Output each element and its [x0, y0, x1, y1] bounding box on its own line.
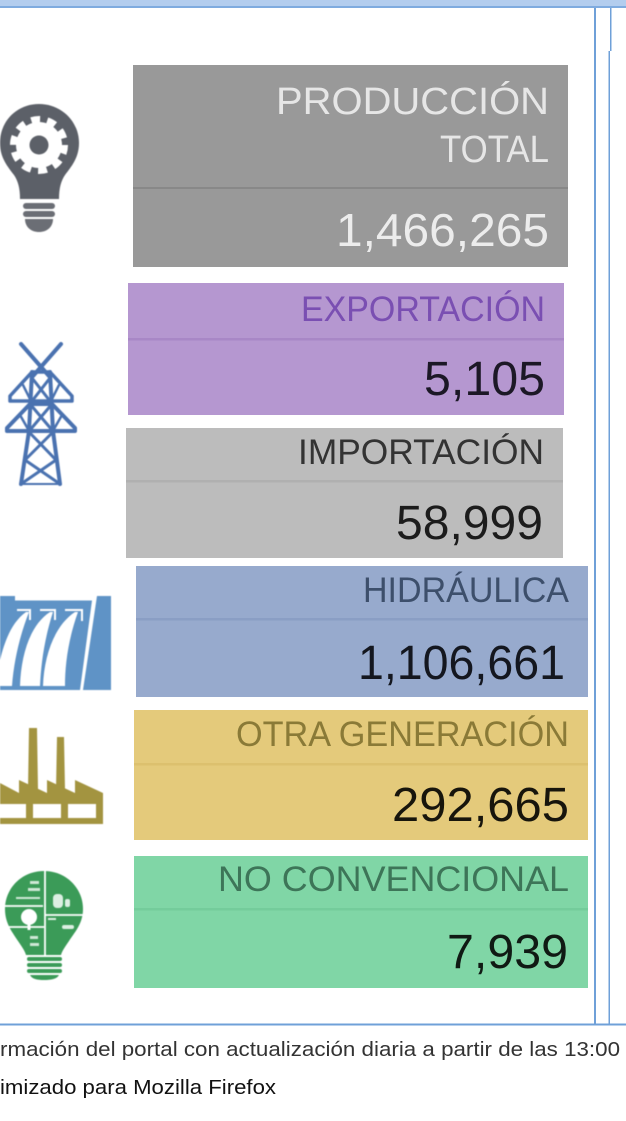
panel: hidráulica: HIDRÁULICA [363, 571, 570, 610]
panel: importación: IMPORTACIÓN [298, 433, 544, 472]
icon: hydroelectric dam [0, 596, 111, 690]
panel: no convencional: NO CONVENCIONAL [218, 860, 569, 899]
top frame bar [0, 0, 626, 8]
panel: producción total: 1,466,265 [336, 204, 549, 256]
panel: producción total [133, 65, 568, 267]
panel: exportación [128, 283, 564, 415]
panel: producción total: TOTAL [440, 129, 549, 171]
panel: otra generación: OTRA GENERACIÓN [236, 715, 569, 754]
panel: otra generación [134, 710, 588, 840]
panel: no convencional: 7,939 [447, 926, 568, 979]
panel: otra generación: 292,665 [392, 779, 569, 832]
panel: importación: 58,999 [396, 497, 543, 550]
panel: producción total: PRODUCCIÓN [276, 80, 549, 123]
panel: hidráulica: 1,106,661 [358, 637, 565, 690]
panel: importación [126, 428, 563, 558]
icon: transmission tower [7, 344, 75, 484]
panel: no convencional [134, 856, 588, 988]
panel: exportación: EXPORTACIÓN [301, 290, 545, 329]
icon: green eco light bulb [5, 871, 83, 980]
panel: hidráulica [136, 566, 588, 697]
panel: exportación: 5,105 [424, 353, 545, 406]
icon: factory [0, 728, 103, 824]
icon: light bulb with gear [0, 104, 79, 232]
footer note: browser: imizado para Mozilla Firefox [0, 1076, 277, 1099]
footer note: update schedule: rmación del portal con actualización diaria a partir de las 13:00 [0, 1038, 620, 1061]
